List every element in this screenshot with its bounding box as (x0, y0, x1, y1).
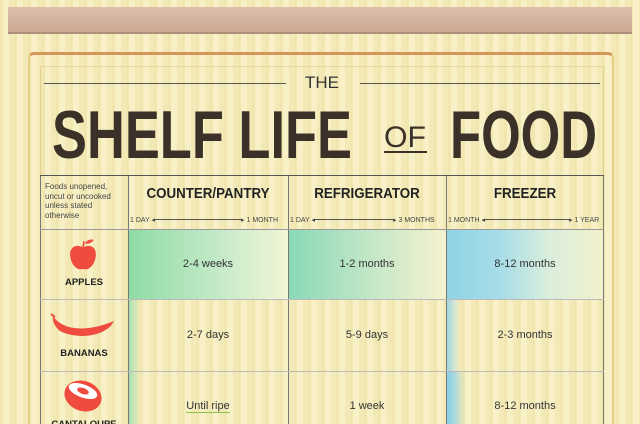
icon: apple (70, 240, 96, 270)
icon: banana (50, 313, 114, 336)
title: THE: THE (305, 73, 339, 92)
header: freezer: FREEZER (494, 186, 556, 202)
row: bananas: 2-7 days (187, 329, 229, 341)
scale: freezer: 1 MONTH ◂ ▸ 1 YEAR (448, 217, 599, 224)
row: bananas (50, 313, 553, 359)
row: bananas: 5-9 days (346, 329, 388, 341)
inner panel (40, 66, 604, 424)
row: apples: 2-4 weeks (183, 258, 233, 270)
row: apples (65, 240, 556, 288)
row: cantaloupe (51, 380, 556, 424)
note text: Foods unopened, uncut or uncooked unless stated otherwise (45, 182, 111, 220)
header: refrigerator: REFRIGERATOR (314, 186, 420, 202)
row: apples: 1-2 months (339, 258, 395, 270)
label: bananas: BANANAS (60, 348, 108, 359)
icon: cantaloupe (64, 380, 102, 412)
header: counter/pantry: COUNTER/PANTRY (146, 186, 270, 202)
scale: counter: 1 DAY ◂ ▸ 1 MONTH (130, 217, 278, 224)
label: apples: APPLES (65, 277, 103, 288)
top shelf bar (8, 7, 632, 34)
title: SHELF LIFE OF FOOD: OF (384, 121, 426, 154)
row: apples: 8-12 months (494, 258, 556, 270)
scale: fridge: 1 DAY ◂ ▸ 3 MONTHS (290, 217, 435, 224)
table (40, 175, 604, 424)
row: cantaloupe: 8-12 months (494, 400, 556, 412)
row: bananas: 2-3 months (497, 329, 553, 341)
row: cantaloupe: Until ripe (186, 400, 230, 412)
row: cantaloupe: 1 week (350, 400, 384, 412)
